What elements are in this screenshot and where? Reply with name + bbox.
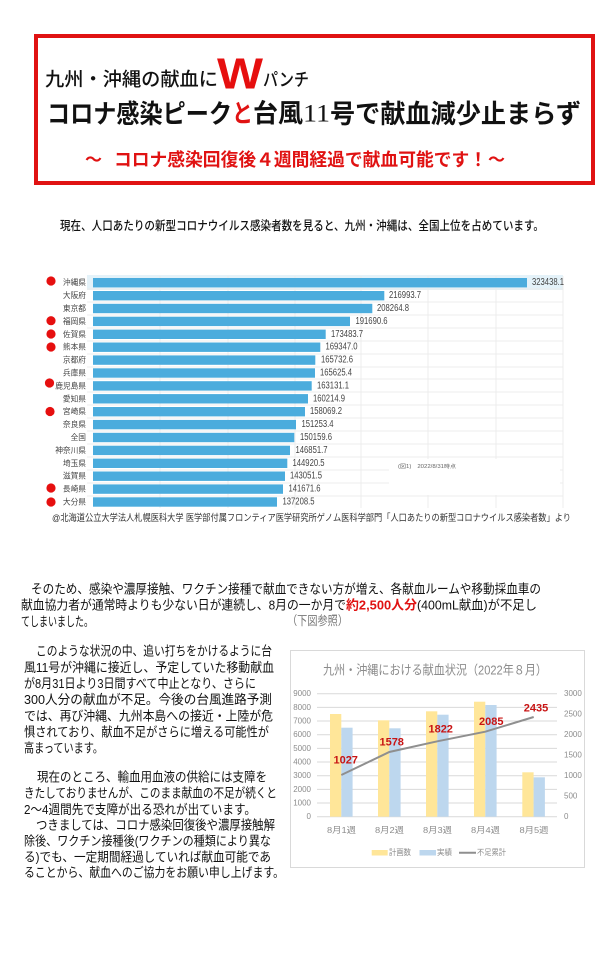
right axis: 3000: [564, 689, 582, 698]
heading: first line: パンチ: [263, 70, 309, 90]
prefecture labels: 長崎県: [63, 484, 86, 494]
markers: Kyushu and Okinawa prefectures: [45, 276, 56, 507]
value labels: 158069.2: [310, 406, 342, 417]
value labels: 165732.6: [321, 355, 353, 366]
text block: supply outlook and request: る)でも、一定期間経過していれば献血可能であ: [24, 850, 271, 864]
value labels: [282, 277, 564, 508]
prefecture labels: 埼玉県: [63, 458, 86, 468]
heading: main title: 台風: [253, 100, 303, 128]
text block: shortage overview: （下図参照）: [287, 614, 348, 628]
left axis: 4000: [293, 758, 312, 766]
data labels: [333, 702, 548, 766]
category labels: 8月3週: [423, 825, 453, 835]
value labels: 165625.4: [320, 368, 352, 378]
left axis: 9000: [293, 689, 312, 698]
right axis: 500: [564, 792, 578, 801]
text block: typhoon impact: 風11号が沖縄に接近し、予定していた移動献血: [24, 660, 274, 675]
actual bars: [341, 705, 545, 817]
right axis: 1500: [564, 751, 582, 760]
text block: supply outlook and request: ることから、献血へのご協力をお願い申し上げます。: [24, 865, 284, 880]
prefecture labels: 宮崎県: [63, 406, 86, 416]
planned bars: [330, 702, 534, 817]
right axis: 1000: [564, 771, 582, 780]
value labels: 151253.4: [302, 419, 334, 430]
prefecture labels: 京都府: [63, 356, 86, 365]
category labels: 8月5週: [520, 825, 549, 835]
value labels: 208264.8: [377, 303, 409, 314]
value labels: 216993.7: [389, 290, 421, 301]
legend: 計画数: [389, 847, 411, 857]
prefecture labels: 東京都: [63, 303, 86, 313]
right axis: 2500: [564, 710, 582, 719]
right axis: 0: [564, 812, 569, 821]
prefecture labels: [55, 277, 86, 506]
prefecture labels: 大阪府: [63, 290, 86, 300]
category labels: 8月1週: [327, 825, 357, 835]
value labels: 137208.5: [282, 496, 315, 508]
text block: supply outlook and request: 2～4週間先で支障が出る恐れが出ています。: [24, 802, 256, 817]
legend: [372, 847, 506, 857]
text block: shortage overview: そのため、感染や濃厚接触、ワクチン接種で献血できない方が増え、各献血ルームや移動採血車の: [31, 582, 541, 596]
left axis: 3000: [293, 771, 312, 780]
left axis: 2000: [293, 785, 312, 794]
value labels: 163131.1: [317, 380, 349, 391]
text block: supply outlook and request: きたしておりませんが、このまま献血の不足が続くと: [24, 786, 277, 800]
prefecture labels: 鹿児島県: [55, 380, 86, 390]
left axis: 8000: [293, 703, 312, 712]
prefecture labels: 福岡県: [63, 316, 86, 326]
heading: first line: 九州・沖縄の献血に: [45, 68, 218, 90]
value labels: 146851.7: [296, 445, 328, 456]
text block: typhoon impact: 高まっています。: [24, 740, 103, 756]
category labels: 8月4週: [471, 825, 501, 835]
value labels: 144920.5: [292, 458, 325, 469]
text block: shortage overview: 約2,500人分: [346, 598, 417, 612]
value labels: 169347.0: [326, 342, 358, 353]
prefecture labels: 沖縄県: [63, 277, 86, 287]
subheading: recovery message: コロナ感染回復後４週間経過で献血可能です！: [114, 149, 487, 170]
text block: typhoon impact: では、再び沖縄、九州本島への接近・上陸が危: [24, 708, 273, 724]
left axis: 0: [307, 812, 312, 821]
value labels: 160214.9: [313, 393, 345, 404]
category labels: 8月2週: [375, 825, 405, 835]
legend: 不足累計: [477, 847, 506, 857]
text block: typhoon impact: このような状況の中、追い打ちをかけるように台: [36, 644, 272, 658]
heading: main title: [47, 99, 581, 129]
text block: shortage overview: 献血協力者が通常時よりも少ない日が連続し、8月の一か月で: [21, 598, 346, 612]
heading: main title: と: [232, 100, 253, 128]
panel: headline box: [36, 36, 593, 183]
prefecture labels: 愛知県: [63, 393, 86, 403]
text block: shortage overview: てしまいました。: [21, 614, 93, 629]
value labels: 191690.6: [356, 316, 388, 327]
subheading: recovery message: ～: [85, 150, 102, 170]
text block: supply outlook and request: つきましては、コロナ感染回復後や濃厚接触解: [36, 818, 275, 832]
text block: typhoon impact: 300人分の献血が不足。今後の台風進路予測: [24, 692, 272, 707]
text block: typhoon impact: が8月31日より3日間すべて中止となり、さらに: [24, 676, 256, 691]
left axis: [293, 689, 312, 821]
left axis: 6000: [293, 730, 312, 739]
right axis: [564, 689, 582, 821]
prefecture labels: 大分県: [63, 496, 86, 506]
category labels: [327, 825, 549, 835]
prefecture labels: 熊本県: [63, 342, 86, 352]
left axis: 1000: [293, 798, 312, 808]
text block: shortage overview: [21, 582, 541, 629]
subheading: recovery message: ～: [488, 150, 505, 170]
combo chart: blood donation status: [290, 650, 584, 868]
heading: first line: W: [217, 50, 264, 98]
data labels: 1578: [379, 737, 404, 749]
value labels: 150159.6: [300, 432, 332, 443]
text block: supply outlook and request: 現在のところ、輸血用血液の供給には支障を: [37, 770, 267, 784]
value labels: 323438.1: [532, 277, 564, 288]
prefecture labels: 佐賀県: [63, 329, 86, 339]
heading: main title: 号で献血減少止まらず: [330, 99, 581, 129]
heading: first line: [45, 50, 309, 98]
note: chart date: (図1) 2022/8/31時点: [398, 464, 456, 470]
left axis: 7000: [293, 716, 312, 726]
left axis: 5000: [293, 744, 312, 753]
text block: supply outlook and request: 除後、ワクチン接種後(ワクチンの種類により異な: [24, 834, 271, 848]
text block: typhoon impact: 惧されており、献血不足がさらに増える可能性が: [24, 724, 269, 740]
value labels: 141671.6: [288, 484, 321, 495]
prefecture labels: 兵庫県: [63, 368, 86, 378]
prefecture labels: 全国: [71, 432, 86, 442]
data labels: 2085: [479, 716, 504, 728]
legend: 実績: [437, 847, 452, 857]
prefecture labels: 神奈川県: [55, 445, 86, 455]
chart title: 九州・沖縄における献血状況（2022年８月）: [323, 662, 547, 678]
bar chart: infections per population by prefecture: [55, 275, 564, 508]
value labels: 173483.7: [331, 329, 363, 340]
data labels: 2435: [524, 702, 548, 714]
prefecture labels: 滋賀県: [63, 471, 86, 481]
heading: main title: 11: [303, 100, 330, 128]
prefecture labels: 奈良県: [63, 419, 86, 429]
cumulative shortage line: [341, 717, 534, 775]
value labels: 143051.5: [290, 471, 322, 482]
right axis: 2000: [564, 730, 582, 739]
heading: main title: コロナ感染ピーク: [47, 99, 232, 129]
text block: supply outlook and request: [24, 770, 284, 880]
data labels: 1027: [333, 754, 358, 766]
text block: shortage overview: (400mL献血)が不足し: [417, 598, 537, 612]
data labels: 1822: [428, 724, 453, 736]
text block: typhoon impact: [24, 644, 274, 756]
